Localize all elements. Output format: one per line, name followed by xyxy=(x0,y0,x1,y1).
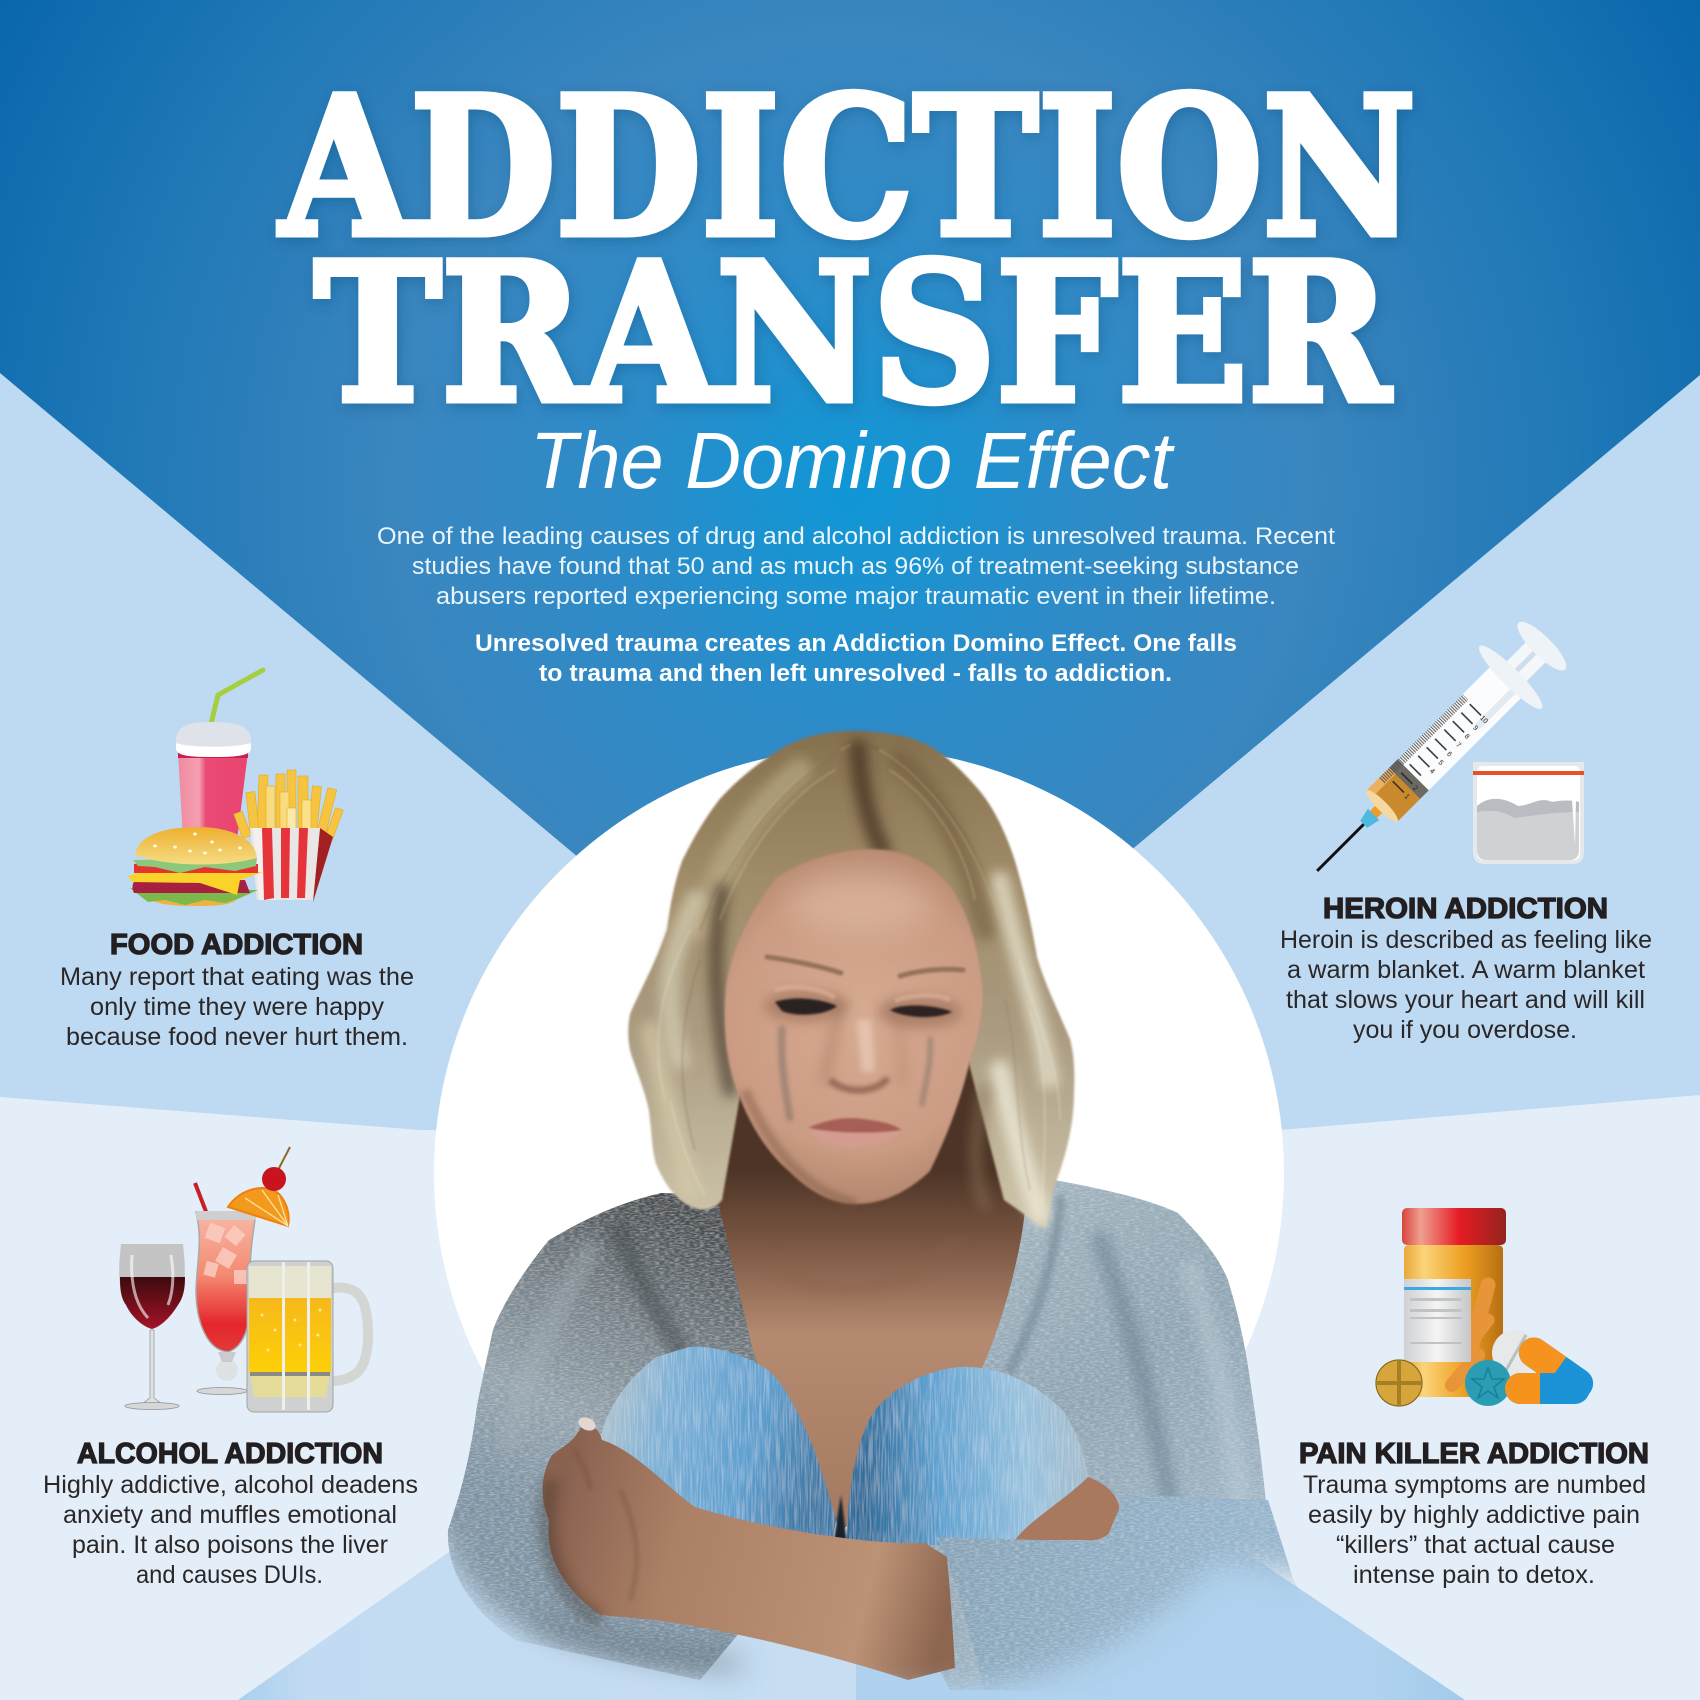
intro bold statement xyxy=(475,630,1237,687)
heading and text: heroin addiction: Heroin is described as feeling like xyxy=(1280,926,1652,954)
beer liquid xyxy=(249,1298,331,1373)
bottle cap xyxy=(1402,1208,1506,1245)
heading and text: food addiction xyxy=(60,929,414,1051)
scale numbers: 5 xyxy=(1437,759,1444,767)
heading and text: heroin addiction: a warm blanket. A warm blanket xyxy=(1287,956,1645,984)
lips xyxy=(808,1118,902,1147)
heading and text: food addiction: FOOD ADDICTION xyxy=(110,929,363,961)
eyebrows xyxy=(767,957,963,976)
red seal xyxy=(1473,771,1584,775)
burger cheese xyxy=(128,872,263,895)
face xyxy=(725,849,983,1204)
beer bottom xyxy=(250,1373,330,1397)
intro bold statement: Unresolved trauma creates an Addiction Domino Effect. One falls xyxy=(475,630,1237,657)
face shading xyxy=(745,875,962,1203)
cocktail straw xyxy=(195,1183,210,1222)
panel: bottom triangle right xyxy=(856,1290,1465,1700)
icon: alcohol xyxy=(119,1147,368,1412)
hair back xyxy=(628,731,1074,1229)
gold coin xyxy=(1376,1360,1422,1406)
hand shadow xyxy=(547,1480,600,1620)
ice xyxy=(203,1223,248,1284)
burger bottom bun xyxy=(147,896,240,906)
teal star pill xyxy=(1465,1360,1511,1406)
burger lettuce xyxy=(130,888,258,905)
finger creases xyxy=(575,1450,637,1600)
cocktail stem xyxy=(216,1359,238,1381)
mug ridges xyxy=(282,1262,310,1410)
sweater torso left xyxy=(448,1193,758,1680)
heading and text: pain killer addiction: PAIN KILLER ADDICTION xyxy=(1299,1438,1649,1470)
bubbles xyxy=(260,1308,322,1352)
panel: top blue chevron xyxy=(0,0,1700,1085)
diagonal capsule xyxy=(1513,1332,1599,1404)
label xyxy=(1404,1279,1471,1362)
white center circle xyxy=(434,748,1284,1598)
flange xyxy=(1473,640,1548,715)
subtitle: The Domino Effect xyxy=(530,416,1175,505)
white pill xyxy=(1492,1330,1538,1376)
tears xyxy=(782,1029,930,1118)
scale numbers: 9 xyxy=(1471,725,1479,732)
scale numbers: 6 xyxy=(1445,751,1453,759)
heading and text: alcohol addiction: and causes DUIs. xyxy=(136,1561,323,1589)
intro text: One of the leading causes of drug and alcohol addiction is unresolved trauma. Recent xyxy=(377,523,1335,550)
heading and text: heroin addiction: you if you overdose. xyxy=(1353,1016,1577,1044)
orange slice xyxy=(228,1188,289,1226)
intro bold statement: to trauma and then left unresolved - falls to addiction. xyxy=(539,660,1172,687)
heading and text: food addiction: only time they were happy xyxy=(90,993,384,1021)
icon: syringe xyxy=(1286,608,1580,902)
bag xyxy=(1473,762,1584,864)
scale numbers: 2 xyxy=(1411,785,1419,793)
burger tomato xyxy=(134,864,258,873)
major ticks xyxy=(1393,704,1481,793)
eyes xyxy=(775,987,952,1017)
scale numbers: 4 xyxy=(1428,768,1436,776)
heading and text: pain killer addiction xyxy=(1299,1438,1649,1589)
burger bun top xyxy=(135,827,257,864)
plunger rod xyxy=(1498,638,1550,690)
scale numbers: 7 xyxy=(1454,742,1462,749)
scale numbers: 10 xyxy=(1478,715,1489,725)
heading and text: alcohol addiction: pain. It also poisons the liver xyxy=(72,1531,388,1559)
heading and text: pain killer addiction: easily by highly addictive pain xyxy=(1308,1501,1640,1529)
neck and chest xyxy=(715,1060,1025,1530)
heading and text: heroin addiction: that slows your heart and will kill xyxy=(1286,986,1645,1014)
gap between knees xyxy=(832,1495,848,1538)
panel: side light blue background xyxy=(0,350,1700,1130)
cherry xyxy=(278,1147,290,1170)
title xyxy=(278,56,1416,446)
panel: lower pale background xyxy=(0,1080,1700,1700)
heading and text: heroin addiction: HEROIN ADDICTION xyxy=(1323,893,1608,925)
right knee xyxy=(846,1367,1095,1545)
sweater torso right xyxy=(928,1180,1298,1690)
sesame xyxy=(153,832,242,854)
barrel xyxy=(1366,662,1526,822)
minor ticks xyxy=(1382,697,1465,780)
sweater folds xyxy=(510,1200,1240,1500)
beer foam xyxy=(249,1266,331,1299)
burger patty xyxy=(132,880,250,893)
heading and text: food addiction: Many report that eating was the xyxy=(60,963,414,991)
horizontal capsule xyxy=(1505,1373,1590,1404)
needle xyxy=(1316,822,1366,872)
title: ADDICTION xyxy=(278,56,1416,280)
bottom shadow xyxy=(530,1628,740,1668)
neck crease xyxy=(770,1240,960,1288)
heading and text: pain killer addiction: “killers” that actual cause xyxy=(1336,1531,1615,1559)
photo: crying woman hugging knees xyxy=(448,731,1300,1695)
icon: pain killers xyxy=(1376,1208,1599,1406)
right sleeve xyxy=(936,1495,1300,1695)
left knee xyxy=(600,1347,836,1545)
intro text: abusers reported experiencing some major traumatic event in their lifetime. xyxy=(436,583,1276,610)
scale numbers xyxy=(1401,715,1489,802)
icon: food xyxy=(128,670,343,906)
scale numbers: 8 xyxy=(1463,733,1470,741)
beer mug xyxy=(247,1261,333,1412)
heading and text: pain killer addiction: intense pain to detox. xyxy=(1353,1561,1595,1589)
straw xyxy=(210,670,263,728)
nose xyxy=(830,1020,888,1090)
scale numbers: 1 xyxy=(1403,793,1410,801)
bottle pills xyxy=(1452,1285,1488,1385)
heading and text: alcohol addiction xyxy=(43,1438,418,1589)
left thumb nail xyxy=(576,1415,598,1433)
heading and text: pain killer addiction: Trauma symptoms are numbed xyxy=(1303,1471,1646,1499)
plunger end xyxy=(1511,616,1572,677)
fries box xyxy=(313,828,333,902)
burger lettuce top xyxy=(133,858,257,873)
cup xyxy=(178,752,248,840)
hub xyxy=(1358,809,1379,830)
beer handle xyxy=(333,1288,368,1381)
right hand xyxy=(1015,1477,1119,1540)
left forearm and hand xyxy=(543,1422,955,1680)
fries xyxy=(234,770,343,840)
lid xyxy=(176,722,251,757)
heading and text: alcohol addiction: ALCOHOL ADDICTION xyxy=(77,1438,383,1470)
wine glass xyxy=(119,1244,185,1329)
heading and text: heroin addiction xyxy=(1280,893,1652,1044)
powder xyxy=(1477,799,1579,860)
cocktail glass xyxy=(196,1212,256,1352)
heading and text: food addiction: because food never hurt them. xyxy=(66,1023,408,1051)
intro text: studies have found that 50 and as much as 96% of treatment-seeking substance xyxy=(412,553,1299,580)
hair shading and strands xyxy=(650,745,1060,1215)
heading and text: alcohol addiction: anxiety and muffles emotional xyxy=(63,1501,397,1529)
heading and text: alcohol addiction: Highly addictive, alcohol deadens xyxy=(43,1471,418,1499)
panel: bottom triangle left xyxy=(238,1266,856,1700)
liquid xyxy=(1366,768,1420,822)
intro text xyxy=(377,523,1335,610)
bottle xyxy=(1404,1245,1503,1397)
title: TRANSFER xyxy=(314,222,1391,446)
icon: powder bag xyxy=(1473,762,1584,864)
